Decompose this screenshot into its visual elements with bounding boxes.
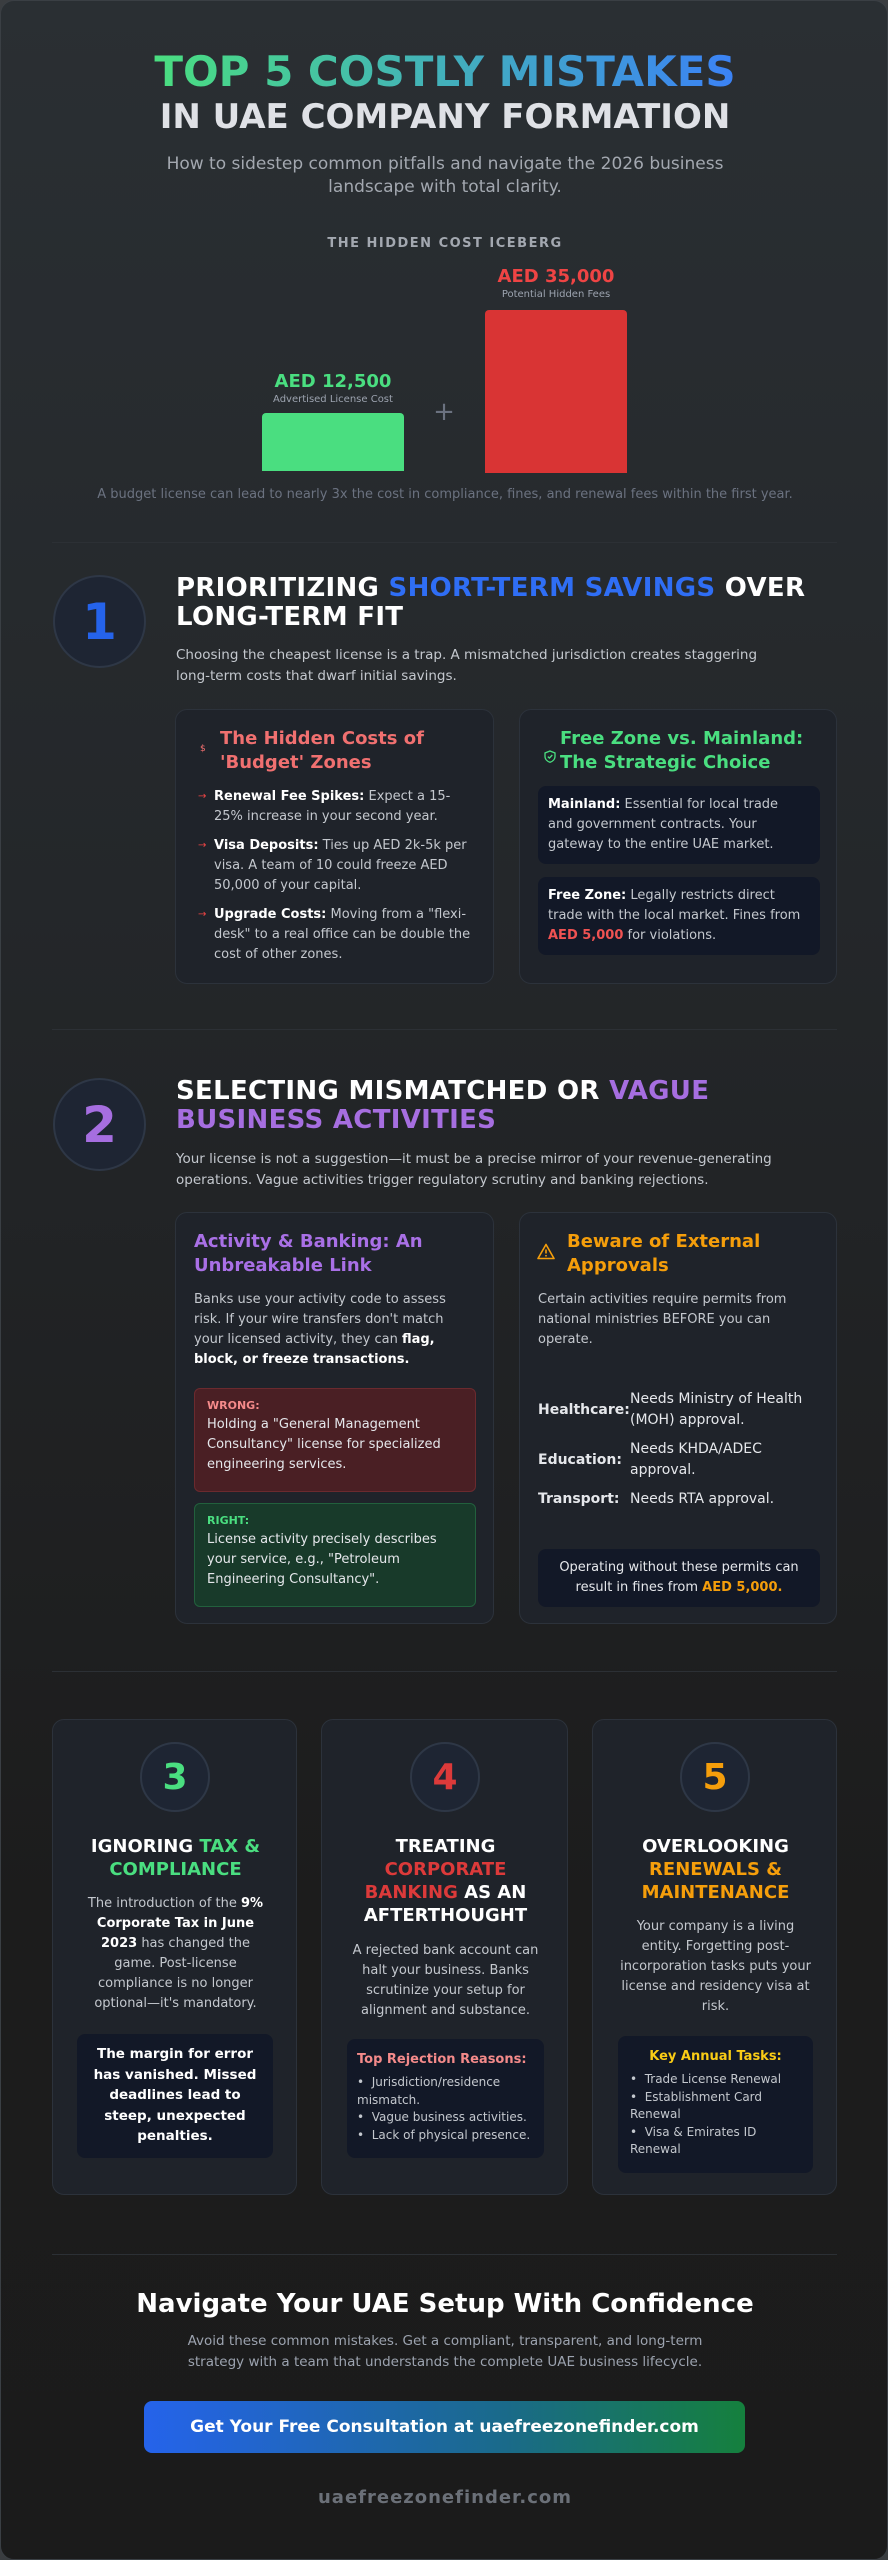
number badge 5 (680, 1742, 750, 1812)
heading 5: MAINTENANCE (642, 1882, 789, 1903)
intro 2: Your license is not a suggestion—it must be a precise mirror of your revenue-generating operations. Vague activities trigger regulatory scrutiny and banking rejections. (176, 1151, 772, 1188)
panel: activity and banking (175, 1212, 494, 1624)
title: IN UAE COMPANY FORMATION (160, 97, 730, 137)
heading 3: IGNORING TAX & (91, 1836, 260, 1857)
approvals list: Needs Ministry of Health (MOH) approval. (630, 1391, 802, 1428)
mainland box (538, 786, 820, 864)
body 3: The introduction of the 9% Corporate Tax in June 2023 has changed the game. Post-license compliance is no longer optional—it's mandatory. (88, 1896, 263, 2011)
right example (194, 1503, 476, 1607)
list of costs: → (198, 840, 206, 851)
free zone box (538, 877, 820, 955)
intro 1: Choosing the cheapest license is a trap. A mismatched jurisdiction creates staggering (176, 647, 757, 663)
title (154, 47, 736, 137)
callout 3 (77, 2034, 273, 2158)
heading 5 (642, 1836, 789, 1903)
fines callout: Operating without these permits can result in fines from AED 5,000. (559, 1560, 799, 1595)
heading 4: BANKING AS AN (365, 1882, 526, 1903)
CTA heading: Navigate Your UAE Setup With Confidence (136, 2289, 754, 2319)
rejection reasons box: • Lack of physical presence. (357, 2128, 530, 2142)
number badge 3: 3 (162, 1756, 188, 1798)
fines callout (538, 1549, 820, 1607)
wrong example: Holding a "General Management Consultancy" license for specialized engineering services. (207, 1417, 441, 1472)
panel: mistake 4 (321, 1719, 568, 2195)
list of costs: Visa Deposits: Ties up AED 2k-5k per visa. A team of 10 could freeze AED 50,000 of your capital. (214, 838, 467, 893)
section 2 (53, 1076, 772, 1188)
heading 2 (176, 1076, 709, 1135)
green bar: advertised cost (262, 371, 404, 471)
red bar: hidden fees: Potential Hidden Fees (502, 289, 610, 300)
wrong example: WRONG: (207, 1399, 260, 1412)
rejection reasons box (347, 2039, 544, 2158)
body 4: A rejected bank account can halt your business. Banks scrutinize your setup for alignment and substance. (353, 1943, 538, 2018)
body text: Banks use your activity code to assess risk. If your wire transfers don't match your licensed activity, they can flag, block, or freeze transactions. (194, 1292, 446, 1367)
red bar: hidden fees: AED 35,000 (498, 266, 614, 287)
panel: hidden costs (175, 709, 494, 984)
approvals list: Education: (538, 1452, 622, 1468)
right example: License activity precisely describes your service, e.g., "Petroleum Engineering Consultancy". (207, 1532, 437, 1587)
chart heading: THE HIDDEN COST ICEBERG (327, 236, 563, 251)
approvals list: Needs RTA approval. (630, 1491, 774, 1507)
heading 4: AFTERTHOUGHT (364, 1905, 527, 1926)
annual tasks box: Key Annual Tasks: (649, 2049, 782, 2064)
heading 3: COMPLIANCE (109, 1859, 242, 1880)
heading 1 (176, 573, 805, 632)
panel: external approvals (519, 1212, 837, 1624)
card title: Beware of External Approvals (567, 1231, 760, 1276)
heading 2: SELECTING MISMATCHED OR VAGUE (176, 1076, 709, 1106)
red bar: hidden fees (485, 266, 627, 473)
approvals list: Transport: (538, 1491, 620, 1507)
heading 2: BUSINESS ACTIVITIES (176, 1105, 496, 1135)
icon: shield (544, 750, 556, 763)
approvals list: Healthcare: (538, 1402, 630, 1418)
annual tasks box: • Establishment Card Renewal (630, 2090, 762, 2121)
number badge 5: 5 (702, 1756, 728, 1798)
approvals list: Needs KHDA/ADEC approval. (630, 1441, 762, 1478)
heading 1: PRIORITIZING SHORT-TERM SAVINGS OVER (176, 573, 805, 603)
wrong example (194, 1388, 476, 1492)
footnote: A budget license can lead to nearly 3x the cost in compliance, fines, and renewal fees within the first year. (97, 487, 793, 502)
callout 3: The margin for error has vanished. Missed deadlines lead to steep, unexpected penalties. (94, 2046, 256, 2144)
heading 4: TREATING (396, 1836, 495, 1857)
heading 4: CORPORATE (385, 1859, 506, 1880)
right example: RIGHT: (207, 1514, 249, 1527)
icon: dollar: $ (200, 744, 206, 754)
rejection reasons box: Top Rejection Reasons: (357, 2052, 527, 2067)
number badge 4: 4 (432, 1756, 458, 1798)
green bar: advertised cost: Advertised License Cost (273, 394, 393, 405)
annual tasks box (618, 2036, 813, 2173)
panel: mistake 5 (592, 1719, 837, 2195)
body text: Certain activities require permits from national ministries BEFORE you can operate. (538, 1292, 786, 1347)
heading 3 (91, 1836, 260, 1880)
plus sign: + (433, 397, 455, 427)
number badge 2 (53, 1078, 146, 1171)
approvals list (538, 1391, 802, 1507)
green bar: advertised cost: AED 12,500 (275, 371, 391, 392)
list of costs (198, 789, 470, 962)
heading 5: OVERLOOKING (642, 1836, 789, 1857)
CTA text: Avoid these common mistakes. Get a compliant, transparent, and long-term strategy with a team that understands the complete UAE business lifecycle. (188, 2333, 702, 2370)
panel: free zone vs mainland (519, 709, 837, 984)
card title: The Hidden Costs of 'Budget' Zones (220, 728, 424, 773)
number badge 1: 1 (82, 592, 117, 650)
iceberg chart (262, 236, 627, 473)
icon: warning (537, 1244, 555, 1260)
list of costs: → (198, 909, 206, 920)
body 5: Your company is a living entity. Forgetting post-incorporation tasks puts your license and residency visa at risk. (620, 1919, 811, 2014)
annual tasks box: • Visa & Emirates ID Renewal (630, 2124, 756, 2156)
rejection reasons box: • Jurisdiction/residence mismatch. (357, 2075, 500, 2106)
title: TOP 5 COSTLY MISTAKES (154, 47, 736, 96)
annual tasks box: • Trade License Renewal (630, 2072, 781, 2086)
list of costs: Renewal Fee Spikes: Expect a 15-25% increase in your second year. (214, 789, 450, 824)
free zone box: Free Zone: Legally restricts direct trade with the local market. Fines from AED 5,000 for violations. (548, 888, 800, 943)
section 1 (53, 573, 805, 684)
footer url: uaefreezonefinder.com (318, 2487, 572, 2508)
intro 1: long-term costs that dwarf initial savings. (176, 668, 457, 684)
number badge 2: 2 (82, 1096, 117, 1154)
mainland box: Mainland: Essential for local trade and government contracts. Your gateway to the entire UAE market. (548, 797, 778, 852)
CTA button: Get Your Free Consultation at uaefreezonefinder.com (190, 2417, 699, 2437)
number badge 1 (53, 575, 146, 668)
heading 5: RENEWALS & (649, 1859, 782, 1880)
CTA button (144, 2401, 745, 2453)
intro 1 (176, 647, 757, 684)
rejection reasons box: • Vague business activities. (357, 2110, 527, 2124)
subtitle: How to sidestep common pitfalls and navigate the 2026 business landscape with total clarity. (167, 154, 723, 197)
panel: mistake 3 (52, 1719, 297, 2195)
number badge 4 (410, 1742, 480, 1812)
list of costs: Upgrade Costs: Moving from a "flexi-desk" to a real office can be double the cost of other zones. (214, 907, 470, 962)
heading 1: LONG-TERM FIT (176, 602, 403, 632)
card title: Free Zone vs. Mainland: The Strategic Choice (560, 728, 803, 773)
heading 4 (364, 1836, 528, 1926)
list of costs: → (198, 791, 206, 802)
number badge 3 (140, 1742, 210, 1812)
card title: Activity & Banking: An Unbreakable Link (194, 1231, 423, 1276)
